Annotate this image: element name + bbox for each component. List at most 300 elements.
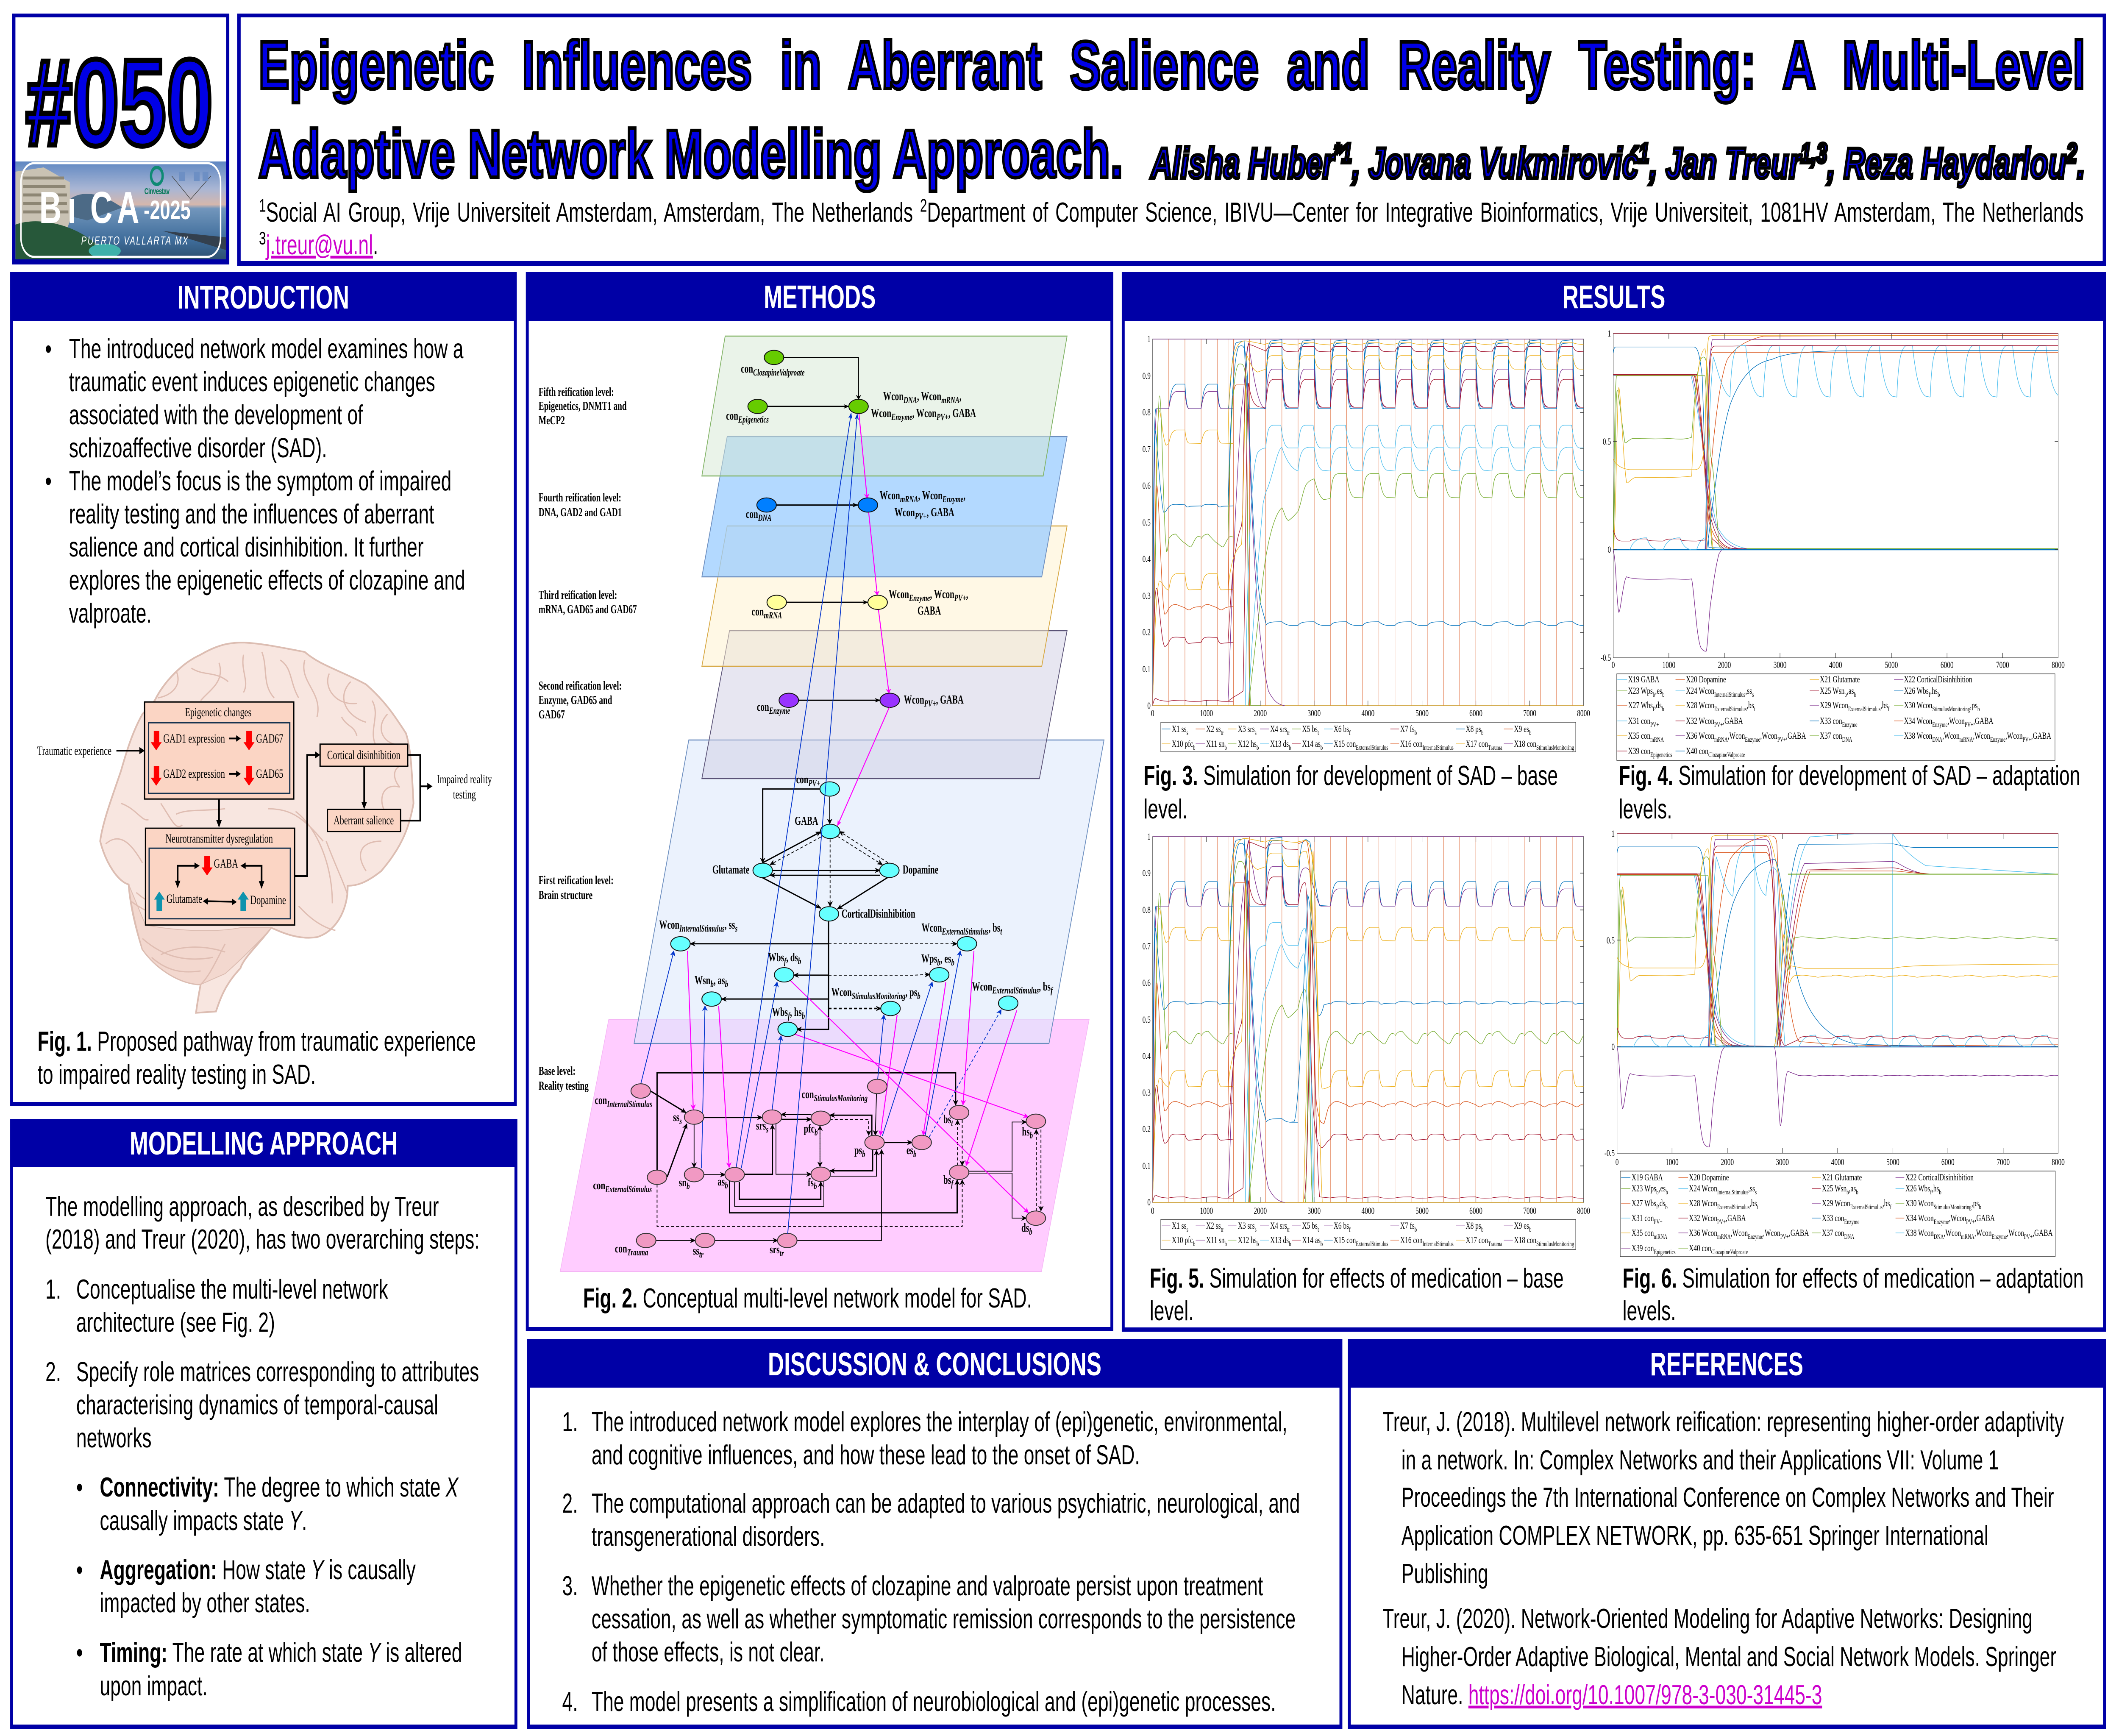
figure 6 legend: X37 conDNA: [1822, 1228, 1854, 1240]
figure 6 axes: 7000: [1997, 1157, 2010, 1168]
discussion list: 1.: [562, 1407, 578, 1437]
figure 3 axes: 0.3: [1143, 591, 1151, 601]
figure 3 legend: X17 conTrauma: [1466, 739, 1502, 751]
figure 1 caption: Fig. 1. Proposed pathway from traumatic experience: [38, 1026, 476, 1057]
figure 4 legend: X21 Glutamate: [1820, 674, 1860, 685]
level labels: mRNA, GAD65 and GAD67: [539, 604, 637, 616]
figure 5 legend: X3 srss: [1238, 1221, 1257, 1233]
figure 6 legend: X39 conEpigenetics: [1632, 1243, 1676, 1255]
figure 4 legend: X36 WconmRNA,WconEnzyme,WconPV+,GABA: [1686, 731, 1806, 743]
figure 1: brain pathway diagram: Epigenetic changes: [185, 705, 251, 719]
node labels: WconExternalStimulus, bsf: [972, 981, 1053, 996]
figure 5 chart: medication base level: [1143, 832, 1590, 1249]
figure 5 legend: X17 conTrauma: [1466, 1235, 1502, 1247]
figure 4 legend: X24 WconInternalStimulus,sss: [1686, 686, 1754, 698]
discussion list: [562, 1407, 1300, 1717]
figure 5 legend: X5 bst: [1302, 1221, 1319, 1233]
figure 5 axes: 4000: [1361, 1206, 1374, 1216]
node labels: pfcb: [804, 1123, 818, 1138]
figure 5 axes: 7000: [1523, 1206, 1536, 1216]
figure 3 axes: 7000: [1523, 708, 1536, 719]
figure 5 legend: X2 sstr: [1206, 1221, 1224, 1233]
figure 6 legend: X23 Wpsb,esb: [1632, 1183, 1668, 1196]
discussion list: 3.: [562, 1571, 578, 1601]
discussion list: The computational approach can be adapted to various psychiatric, neurological, and: [592, 1488, 1300, 1519]
figure 6 legend: X19 GABA: [1632, 1172, 1663, 1183]
introduction bullets: valproate.: [69, 598, 152, 629]
node labels: Glutamate: [712, 864, 750, 876]
introduction bullets: •: [45, 466, 52, 496]
figure 3 legend: X14 asb: [1302, 739, 1323, 751]
figure 5 legend: X8 psb: [1466, 1221, 1483, 1233]
conference logo: [15, 161, 226, 259]
figure 3 axes: 0.4: [1143, 554, 1151, 565]
reference list: Treur, J. (2020). Network-Oriented Modeling for Adaptive Networks: Designing: [1382, 1603, 2033, 1634]
level labels: Reality testing: [539, 1080, 589, 1093]
figure 3 legend: X3 srss: [1238, 724, 1257, 736]
figure 3 axes: 0.8: [1143, 407, 1151, 418]
node labels: asb: [717, 1176, 728, 1191]
figure 3 legend: X6 bsf: [1334, 724, 1351, 736]
poster number: #050: [25, 34, 213, 171]
figure 3 axes: 2000: [1254, 708, 1267, 719]
figure 4 chart: development adaptation levels: [1601, 328, 2065, 760]
figure 5 legend: X13 dsb: [1270, 1235, 1291, 1247]
modelling text: [45, 1191, 480, 1701]
figure 5 data lines: [1153, 837, 1589, 1202]
discussion list: 2.: [562, 1488, 578, 1519]
figure 6 legend: [1620, 1171, 2055, 1257]
node labels: WconmRNA, WconEnzyme,: [880, 490, 965, 505]
figure 6 axes: 1000: [1666, 1157, 1679, 1168]
figure 4 legend: X39 conEpigenetics: [1628, 746, 1672, 758]
level labels: Enzyme, GAD65 and: [539, 694, 612, 707]
figure 4 axes: 4000: [1829, 660, 1842, 670]
introduction bullets: [45, 334, 465, 629]
figure 1: brain pathway diagram: Neurotransmitter dysregulation: [165, 832, 273, 846]
figure 6 axes: 8000: [2052, 1157, 2065, 1168]
figure 4 legend: X22 CorticalDisinhibition: [1904, 674, 1972, 685]
figure 3 legend: X13 dsb: [1270, 739, 1291, 751]
reference list: [1382, 1407, 2064, 1710]
figure 3 legend: X1 sss: [1172, 724, 1188, 736]
discussion list: cessation, as well as whether symptomatic remission corresponds to the persistence: [592, 1604, 1296, 1634]
figure 4 axes: -0.5: [1601, 653, 1611, 663]
node labels: WconExternalStimulus, bst: [922, 922, 1002, 937]
figure 6 legend: X34 WconEnzyme,WconPV+,GABA: [1905, 1213, 1995, 1225]
level labels: Base level:: [539, 1065, 576, 1078]
figure 4 axes: 0: [1612, 660, 1615, 670]
node labels: WconDNA, WconmRNA,: [883, 390, 962, 406]
figure 4 axes: 0.5: [1603, 437, 1611, 447]
figure 1: brain pathway diagram: GAD65: [256, 767, 283, 781]
modelling text: •: [76, 1637, 83, 1668]
level labels: Epigenetics, DNMT1 and: [539, 400, 627, 413]
figure 5 legend: X4 srstr: [1270, 1221, 1290, 1233]
modelling text: architecture (see Fig. 2): [76, 1307, 275, 1338]
conference logo: -2025: [144, 195, 191, 225]
figure 4 caption: Fig. 4. Simulation for development of SAD – adaptation: [1619, 760, 2080, 791]
panel: results: [1122, 272, 2106, 1332]
node labels: fsb: [808, 1177, 817, 1192]
level labels: DNA, GAD2 and GAD1: [539, 506, 622, 519]
node labels: WconEnzyme, WconPV+, GABA: [871, 407, 976, 423]
modelling text: Connectivity: The degree to which state X: [100, 1472, 459, 1502]
level labels: [539, 386, 637, 1093]
figure 6 legend: X28 WconExternalStimulus,bst: [1689, 1198, 1758, 1210]
panel: introduction: [10, 272, 517, 1106]
figure 6 axes: -0.5: [1605, 1148, 1615, 1159]
node labels: conmRNA: [752, 606, 782, 621]
figure 6 caption: levels.: [1623, 1296, 1676, 1326]
base level plane: [560, 1019, 1089, 1271]
node labels: GABA: [918, 605, 941, 618]
figure 3 legend: X10 pfcb: [1172, 739, 1196, 751]
figure 6 axes: 6000: [1941, 1157, 1955, 1168]
introduction bullets: explores the epigenetic effects of clozapine and: [69, 565, 465, 595]
introduction bullets: associated with the development of: [69, 400, 363, 430]
figure 6 axes: 5000: [1886, 1157, 1899, 1168]
figure 5 legend: X10 pfcb: [1172, 1235, 1196, 1247]
figure 4 legend: X35 conmRNA: [1628, 731, 1664, 743]
figure 3 legend: X2 sstr: [1206, 724, 1224, 736]
heading: references: REFERENCES: [1650, 1346, 1803, 1382]
figure 1: brain pathway diagram: Aberrant salience: [334, 813, 394, 827]
discussion list: Whether the epigenetic effects of clozapine and valproate persist upon treatment: [592, 1571, 1263, 1601]
figure 3 axes: 3000: [1307, 708, 1321, 719]
figure 5 legend: X18 conStimulusMonitoring: [1514, 1235, 1574, 1247]
node labels: esb: [907, 1144, 916, 1160]
heading: introduction: INTRODUCTION: [178, 279, 349, 315]
level labels: Fifth reification level:: [539, 386, 614, 399]
discussion list: The model presents a simplification of neurobiological and (epi)genetic processes.: [592, 1686, 1276, 1717]
figure 3 axes: 0: [1147, 701, 1151, 711]
figure 6 data lines: [1617, 834, 2064, 1147]
figure 3 legend: X12 hsb: [1238, 739, 1259, 751]
second reification plane: [702, 631, 1067, 779]
node labels: dsb: [1021, 1222, 1032, 1237]
reference list: Application COMPLEX NETWORK, pp. 635-651 Springer International: [1402, 1520, 1988, 1551]
node labels: conExternalStimulus: [593, 1180, 652, 1195]
figure 5 legend: X14 asb: [1302, 1235, 1323, 1247]
figure 1: brain pathway diagram: GAD1 expression: [163, 732, 225, 746]
node labels: CorticalDisinhibition: [842, 908, 915, 921]
figure 6 legend: X30 WconStimulusMonitoring,psb: [1905, 1198, 1981, 1210]
figure 5 axes: 1: [1147, 832, 1151, 842]
modelling text: Specify role matrices corresponding to attributes: [76, 1357, 479, 1387]
node labels: Dopamine: [903, 864, 939, 876]
figure 3 legend: X7 fsb: [1400, 724, 1417, 736]
number panel: [12, 14, 229, 264]
figure 3 axes: 5000: [1415, 708, 1429, 719]
figure 5 legend: X11 snb: [1206, 1235, 1227, 1247]
fifth reification plane: [702, 336, 1067, 476]
figure 4 legend: X26 Wbsf,hsb: [1904, 686, 1940, 698]
node labels: bsf: [943, 1174, 954, 1189]
figure 3 legend: X8 psb: [1466, 724, 1483, 736]
figure 4 legend: X20 Dopamine: [1686, 674, 1726, 685]
figure 4 axes: 2000: [1718, 660, 1731, 670]
figure 5 legend: X15 conExternalStimulus: [1334, 1235, 1388, 1247]
modelling text: 1.: [45, 1274, 61, 1305]
discussion list: of those effects, is not clear.: [592, 1637, 825, 1667]
figure 5 legend: X7 fsb: [1400, 1221, 1417, 1233]
figure 6 legend: X32 WconPV+,GABA: [1689, 1213, 1746, 1225]
modelling text: Conceptualise the multi-level network: [76, 1274, 388, 1305]
figure 6 legend: X29 WconExternalStimulus,bsf: [1822, 1198, 1891, 1210]
figure 6 legend: X25 Wsnb,asb: [1822, 1183, 1858, 1196]
figure 1: brain pathway diagram: [37, 643, 492, 1013]
figure 3 caption: [1143, 760, 1558, 824]
figure 3 legend: X5 bst: [1302, 724, 1319, 736]
reference list: Proceedings the 7th International Conference on Complex Networks and Their: [1402, 1482, 2054, 1513]
title line 1: Epigenetic Influences in Aberrant Salience and Reality Testing: A Multi-Level: [259, 28, 2086, 103]
modelling text: Timing: The rate at which state Y is altered: [100, 1637, 462, 1668]
figure 5 axes: 8000: [1577, 1206, 1590, 1216]
figure 6 axes: 0: [1611, 1042, 1615, 1052]
introduction bullets: traumatic event induces epigenetic changes: [69, 367, 435, 397]
figure 3 axes: 4000: [1361, 708, 1374, 719]
figure 6 caption: Fig. 6. Simulation for effects of medication – adaptation: [1623, 1263, 2084, 1294]
box: epigenetic changes: [117, 702, 433, 925]
figure 6 axes: 4000: [1831, 1157, 1844, 1168]
introduction bullets: •: [45, 334, 52, 364]
figure 3 data lines: [1153, 339, 1589, 706]
figure 6 legend: X24 WconInternalStimulus,sss: [1689, 1183, 1757, 1196]
node labels: [593, 363, 1053, 1260]
figure 6 legend: X22 CorticalDisinhibition: [1905, 1172, 1974, 1183]
node labels: Wsnb, asb: [695, 974, 728, 990]
figure 4 legend: X33 conEnzyme: [1820, 716, 1858, 728]
figure 5 legend: [1161, 1219, 1576, 1249]
figure 1 caption: to impaired reality testing in SAD.: [38, 1059, 316, 1090]
figure 5 axes: 6000: [1469, 1206, 1482, 1216]
figure 4 legend: X28 WconExternalStimulus,bst: [1686, 700, 1755, 712]
figure 4 legend: X37 conDNA: [1820, 731, 1852, 743]
figure 3 axes: 0.1: [1143, 664, 1151, 675]
node labels: WconPV+, GABA: [904, 694, 964, 709]
figure 5 caption: level.: [1150, 1296, 1194, 1326]
figure 6 chart: medication adaptation levels: [1605, 829, 2065, 1257]
figure 5 axes: 0.6: [1143, 978, 1151, 988]
figure 6 legend: X20 Dopamine: [1689, 1172, 1729, 1183]
introduction bullets: The model’s focus is the symptom of impaired: [69, 466, 451, 496]
figure 2: multi-level network: [539, 336, 1104, 1271]
conference logo: PUERTO VALLARTA MX: [81, 234, 188, 248]
figure 5 axes: 0.2: [1143, 1124, 1151, 1135]
introduction bullets: schizoaffective disorder (SAD).: [69, 433, 327, 463]
figure 3 axes: 0.2: [1143, 627, 1151, 638]
node labels: GABA: [795, 815, 818, 828]
figure 3 axes: 0: [1151, 708, 1154, 719]
discussion list: and cognitive influences, and how these lead to the onset of SAD.: [592, 1440, 1140, 1470]
figure 5 axes: 0.4: [1143, 1051, 1151, 1062]
figure 6 legend: X33 conEnzyme: [1822, 1213, 1859, 1225]
figure 3 legend: X4 srstr: [1270, 724, 1290, 736]
reference list: Publishing: [1402, 1558, 1488, 1589]
figure 4 caption: levels.: [1619, 794, 1672, 824]
reference list: Treur, J. (2018). Multilevel network reification: representing higher-order adaptivity: [1382, 1407, 2064, 1437]
panel: modelling approach: [10, 1119, 517, 1729]
figure 1: brain pathway diagram: Traumatic experience: [37, 744, 111, 758]
node labels: conClozapineValproate: [741, 363, 805, 378]
figure 5 axes: 3000: [1307, 1206, 1321, 1216]
discussion list: The introduced network model explores the interplay of (epi)genetic, environmental,: [592, 1407, 1288, 1437]
figure 3 axes: 0.6: [1143, 481, 1151, 491]
node labels: sstr: [693, 1245, 704, 1260]
reference list: in a network. In: Complex Networks and their Applications VII: Volume 1: [1402, 1445, 1999, 1475]
node labels: sss: [673, 1111, 682, 1127]
node labels: Wbsf, dsb: [768, 951, 801, 967]
authors: Alisha Huber*1, Jovana Vukmirović1, Jan Treur1,3, Reza Haydarlou2.: [1150, 138, 2085, 187]
figure 1 caption: [38, 1026, 476, 1090]
figure 5 legend: X1 sss: [1172, 1221, 1188, 1233]
figure 5 axes: 0.3: [1143, 1088, 1151, 1098]
modelling text: impacted by other states.: [100, 1588, 310, 1618]
node labels: psb: [854, 1144, 865, 1160]
figure 6 legend: X35 conmRNA: [1632, 1228, 1667, 1240]
figure 5 axes: 1000: [1200, 1206, 1213, 1216]
figure 6 legend: X38 WconDNA,WconmRNA,WconEnzyme,WconPV+,GABA: [1905, 1228, 2053, 1240]
node labels: conInternalStimulus: [595, 1094, 652, 1110]
figure 4 axes: 5000: [1885, 660, 1898, 670]
figure 3 axes: 8000: [1577, 708, 1590, 719]
figure 4 axes: 8000: [2052, 660, 2065, 670]
level labels: First reification level:: [539, 874, 614, 887]
node labels: Wpsb, esb: [921, 953, 954, 968]
figure 5 axes: 0.7: [1143, 941, 1151, 952]
figure 6 axes: 2000: [1721, 1157, 1734, 1168]
figure 6 legend: X40 conClozapineValproate: [1689, 1243, 1748, 1255]
figure 6 legend: X36 WconmRNA,WconEnzyme,WconPV+,GABA: [1689, 1228, 1809, 1240]
figure 4 legend: X30 WconStimulusMonitoring,psb: [1904, 700, 1980, 712]
figure 3 legend: X11 snb: [1206, 739, 1227, 751]
figure 6 axes: 3000: [1776, 1157, 1789, 1168]
figure 6 legend: X27 Wbsf,dsb: [1632, 1198, 1668, 1210]
figure 5 axes: 0.9: [1143, 868, 1151, 879]
figure 3 axes: 1000: [1200, 708, 1213, 719]
figure 4 axes: 0: [1607, 545, 1611, 555]
figure 6 axes: 0.5: [1607, 935, 1615, 946]
figure 6 axes: [1605, 829, 2065, 1168]
modelling text: networks: [76, 1423, 152, 1453]
figure 6 axes: 1: [1611, 829, 1615, 839]
figure 4 axes: 1000: [1662, 660, 1675, 670]
figure 4 legend: X32 WconPV+,GABA: [1686, 716, 1743, 728]
modelling text: upon impact.: [100, 1671, 208, 1701]
figure 4 axes: 3000: [1774, 660, 1786, 670]
node labels: bst: [943, 1113, 953, 1129]
node labels: conPV+: [796, 773, 820, 789]
upper network nodes and arrows: [748, 351, 899, 707]
introduction bullets: reality testing and the influences of aberrant: [69, 499, 434, 529]
first reification plane: [634, 740, 1104, 1043]
figure 3 caption: level.: [1143, 794, 1187, 824]
figure 1: brain pathway diagram: Impaired reality: [437, 772, 492, 786]
figure 4 axes: 6000: [1941, 660, 1954, 670]
figure 5 legend: X9 esb: [1514, 1221, 1532, 1233]
level labels: Fourth reification level:: [539, 492, 621, 504]
heading: methods: METHODS: [764, 278, 876, 315]
figure 4 legend: X34 WconEnzyme,WconPV+,GABA: [1904, 716, 1994, 728]
node labels: srss: [756, 1120, 768, 1135]
figure 5 legend: X6 bsf: [1334, 1221, 1351, 1233]
figure 4 legend: X40 conClozapineValproate: [1686, 746, 1745, 758]
node labels: WconEnzyme, WconPV+,: [889, 588, 968, 604]
contact email: 3j.treur@vu.nl.: [259, 228, 378, 260]
reference list: Nature. https://doi.org/10.1007/978-3-030-31445-3: [1402, 1680, 1822, 1710]
figure 3 axes: 0.9: [1143, 371, 1151, 381]
modelling text: (2018) and Treur (2020), has two overarching steps:: [45, 1224, 480, 1255]
figure 1: brain pathway diagram: GABA: [214, 857, 239, 871]
figure 4 axes: 1: [1607, 328, 1611, 339]
level labels: GAD67: [539, 709, 565, 721]
node labels: conTrauma: [615, 1243, 648, 1258]
figure 4 data lines: [1613, 334, 2063, 651]
figure 3 axes: [1143, 334, 1590, 719]
modelling text: •: [76, 1472, 83, 1502]
figure 3 caption: Fig. 3. Simulation for development of SAD – base: [1143, 760, 1558, 791]
panel: discussion and conclusions: [527, 1339, 1342, 1729]
node labels: srstr: [770, 1244, 784, 1259]
figure 4 legend: X31 conPV+: [1628, 716, 1659, 728]
panel: references: [1348, 1339, 2106, 1729]
figure 5 axes: 0.5: [1143, 1015, 1151, 1025]
figure 3 legend: X16 conInternalStimulus: [1400, 739, 1454, 751]
level labels: Brain structure: [539, 889, 592, 902]
title line 2: Adaptive Network Modelling Approach.: [259, 117, 1123, 192]
figure 5 axes: 0: [1147, 1197, 1151, 1208]
figure 4 legend: X27 Wbsf,dsb: [1628, 700, 1664, 712]
long inter-level arrows: [736, 413, 889, 1234]
node labels: conStimulusMonitoring: [802, 1088, 868, 1104]
figure 1: brain pathway diagram: GAD67: [256, 732, 283, 746]
title panel: [237, 14, 2106, 266]
modelling text: •: [76, 1555, 83, 1585]
figure 1: brain pathway diagram: Dopamine: [250, 893, 286, 907]
figure 4 legend: X23 Wpsb,esb: [1628, 686, 1665, 698]
figure 3 axes: 0.7: [1143, 444, 1151, 455]
modelling text: 2.: [45, 1357, 61, 1387]
modelling text: The modelling approach, as described by Treur: [45, 1191, 439, 1222]
node labels: hsb: [1022, 1126, 1033, 1141]
lower network arrows: [631, 782, 1046, 1248]
affiliations: 1Social AI Group, Vrije Universiteit Amsterdam, Amsterdam, The Netherlands 2Department of Computer Science, IBIVU—Center for Integrative Bioinformatics, Vrije Universiteit, 1081HV Amsterdam, The Netherlands: [259, 196, 2083, 228]
modelling text: causally impacts state Y.: [100, 1505, 307, 1536]
figure 6 axes: 0: [1616, 1157, 1618, 1168]
figure 5 legend: X12 hsb: [1238, 1235, 1259, 1247]
node labels: conDNA: [746, 508, 772, 523]
figure 1: brain pathway diagram: Cortical disinhibition: [327, 748, 400, 762]
figure 4 axes: [1601, 328, 2065, 670]
introduction bullets: The introduced network model examines how a: [69, 334, 464, 364]
figure 4 legend: X25 Wsnb,asb: [1820, 686, 1856, 698]
figure 5 axes: 0.1: [1143, 1161, 1151, 1171]
figure 1: brain pathway diagram: Glutamate: [167, 892, 202, 906]
brain illustration: [100, 643, 414, 1013]
conference logo: Cinvestav: [145, 186, 170, 196]
figure 3 axes: 1: [1147, 334, 1151, 345]
discussion list: 4.: [562, 1686, 578, 1717]
figure 4 legend: X29 WconExternalStimulus,bsf: [1820, 700, 1890, 712]
third reification plane: [702, 526, 1067, 666]
figure 4 legend: X38 WconDNA,WconmRNA,WconEnzyme,WconPV+,GABA: [1904, 731, 2051, 743]
level labels: Second reification level:: [539, 680, 622, 693]
figure 5 axes: [1143, 832, 1590, 1216]
introduction bullets: salience and cortical disinhibition. It further: [69, 532, 424, 562]
figure 5 legend: X16 conInternalStimulus: [1400, 1235, 1454, 1247]
node labels: conEpigenetics: [726, 410, 769, 425]
